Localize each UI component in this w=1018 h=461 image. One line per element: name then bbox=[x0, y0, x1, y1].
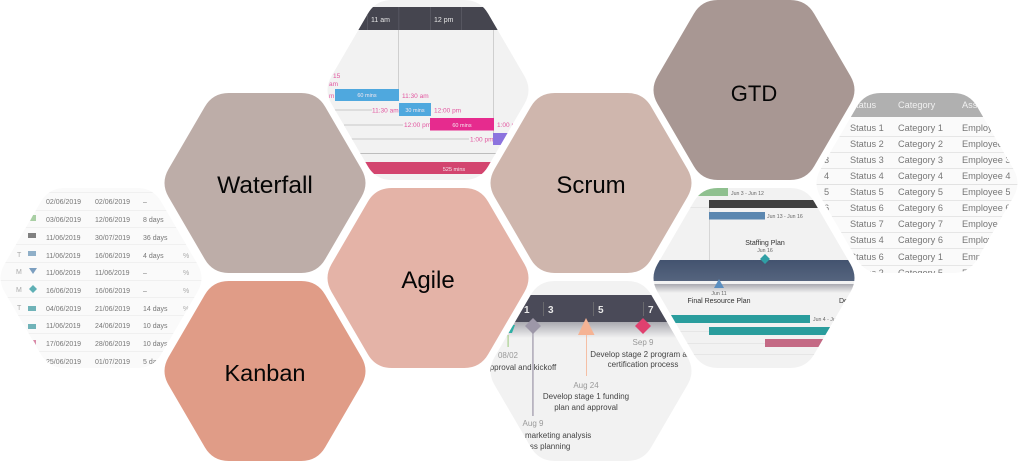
panel: gantt chart hexagon bbox=[654, 188, 854, 368]
panel: gantt chart hexagon: Final Resource Plan bbox=[687, 298, 751, 305]
panel: left task table hexagon: 12/06/2019 bbox=[95, 217, 130, 224]
panel: left task table hexagon: 11/06/2019 bbox=[95, 270, 130, 277]
panel: left task table hexagon: 5 days bbox=[143, 359, 164, 366]
panel: gantt chart hexagon: Jun 13 - Jun 16 bbox=[767, 214, 803, 220]
panel: milestone timeline hexagon: ness planning bbox=[521, 442, 570, 451]
panel: left task table hexagon: 16/06/2019 bbox=[95, 253, 130, 260]
panel: left task table hexagon: 4 days bbox=[143, 253, 164, 260]
panel: milestone timeline hexagon: marketing analysis bbox=[525, 431, 591, 440]
hexagon: Kanban bbox=[164, 281, 366, 461]
panel: status table hexagon: Status 6 bbox=[850, 252, 884, 262]
panel: gantt chart hexagon: Jun 11 bbox=[711, 291, 727, 297]
panel: calendar timeline hexagon: 12:00 pm bbox=[404, 122, 431, 129]
panel: left task table hexagon: M bbox=[16, 287, 22, 294]
panel: milestone timeline hexagon: Sep 9 bbox=[633, 338, 654, 347]
panel: milestone timeline hexagon: 1 bbox=[524, 305, 530, 316]
panel: gantt chart hexagon: Jun 16 bbox=[757, 248, 773, 254]
panel: milestone timeline hexagon: pproval and kickoff bbox=[490, 363, 557, 372]
panel: calendar timeline hexagon: 15 bbox=[333, 73, 341, 80]
panel: milestone timeline hexagon: certification process bbox=[608, 360, 678, 369]
panel: status table hexagon: Category 5 bbox=[898, 187, 943, 197]
panel: status table hexagon: Category 4 bbox=[898, 171, 943, 181]
panel: left task table hexagon: M bbox=[16, 269, 22, 276]
panel: status table hexagon: Status 1 bbox=[850, 123, 884, 133]
panel: calendar timeline hexagon bbox=[320, 0, 536, 180]
panel: milestone timeline hexagon: Aug 9 bbox=[523, 419, 544, 428]
panel: left task table hexagon: % bbox=[183, 270, 189, 277]
panel: calendar timeline hexagon: 11:30 am bbox=[372, 108, 399, 114]
panel: gantt chart hexagon: Staffing Plan bbox=[745, 240, 785, 247]
panel: status table hexagon: Status 5 bbox=[850, 187, 884, 197]
panel: status table hexagon: Status 4 bbox=[850, 235, 884, 245]
panel: status table hexagon bbox=[810, 93, 1018, 278]
panel: status table hexagon: Category 6 bbox=[898, 203, 943, 213]
panel: status table hexagon: Category 5 bbox=[898, 268, 943, 278]
hexagon: Scrum: Scrum bbox=[556, 172, 626, 199]
panel: status table hexagon: Category 2 bbox=[898, 139, 943, 149]
panel: status table hexagon: Category bbox=[898, 100, 936, 110]
panel: calendar timeline hexagon: 1:00 pm bbox=[470, 136, 494, 144]
panel: milestone timeline hexagon: plan and approval bbox=[554, 403, 618, 412]
panel: left task table hexagon: % bbox=[183, 288, 189, 295]
panel: status table hexagon: Employee 1 bbox=[962, 123, 1011, 133]
panel: left task table hexagon: 11/06/2019 bbox=[46, 323, 81, 330]
panel: left task table hexagon: 8 days bbox=[143, 217, 164, 224]
panel: left task table hexagon: 24/06/2019 bbox=[95, 323, 130, 330]
panel: status table hexagon: Category 6 bbox=[898, 235, 943, 245]
hexagon: Kanban: Kanban bbox=[224, 360, 306, 386]
panel: left task table hexagon: 04/06/2019 bbox=[46, 306, 81, 313]
panel: calendar timeline hexagon: 525 mins bbox=[443, 167, 465, 173]
hexagon: Waterfall bbox=[164, 93, 366, 273]
panel: status table hexagon: 5 bbox=[824, 187, 829, 197]
panel: left task table hexagon: 14 days bbox=[143, 306, 168, 313]
hexagon: Scrum bbox=[490, 93, 692, 273]
panel: calendar timeline hexagon: 60 mins bbox=[357, 93, 377, 99]
panel: left task table hexagon: 03/06/2019 bbox=[46, 217, 81, 224]
panel: status table hexagon: 6 bbox=[824, 203, 829, 213]
panel: left task table hexagon: 02/06/2019 bbox=[95, 199, 130, 206]
panel: gantt chart hexagon: Jun 4 - Jun 30 bbox=[813, 317, 846, 323]
panel: left task table hexagon: 25/06/2019 bbox=[46, 359, 81, 366]
panel: milestone timeline hexagon: 5 bbox=[598, 305, 604, 316]
panel: status table hexagon: Employee 4 bbox=[962, 235, 1011, 245]
panel: left task table hexagon: 02/06/2019 bbox=[46, 199, 81, 206]
panel: calendar timeline hexagon: 1:00 pm bbox=[497, 122, 520, 129]
hexagon: Agile: Agile bbox=[401, 267, 455, 294]
panel: calendar timeline hexagon: 12 pm bbox=[434, 17, 454, 24]
panel: status table hexagon: Employee 3 bbox=[962, 155, 1011, 165]
panel: status table hexagon: Employee 7 bbox=[962, 219, 1011, 229]
panel: left task table hexagon: – bbox=[143, 270, 147, 277]
panel: status table hexagon: Status 3 bbox=[850, 155, 884, 165]
panel: left task table hexagon: 21/06/2019 bbox=[95, 306, 130, 313]
panel: status table hexagon: Category 1 bbox=[898, 252, 943, 262]
hexagon: GTD: GTD bbox=[731, 81, 777, 106]
panel: gantt chart hexagon: Development bbox=[839, 298, 880, 305]
panel: status table hexagon: Category 1 bbox=[898, 123, 943, 133]
panel: milestone timeline hexagon: Develop stage 1 funding bbox=[543, 392, 629, 401]
panel: status table hexagon: Status 6 bbox=[850, 203, 884, 213]
panel: milestone timeline hexagon bbox=[485, 281, 697, 461]
panel: status table hexagon: 4 bbox=[824, 171, 829, 181]
panel: calendar timeline hexagon: 60 mins bbox=[452, 123, 472, 129]
panel: milestone timeline hexagon: Aug 24 bbox=[573, 381, 599, 390]
panel: calendar timeline hexagon: 30 mins bbox=[405, 108, 425, 114]
panel: calendar timeline hexagon: m bbox=[329, 93, 334, 100]
panel: left task table hexagon: 30/07/2019 bbox=[95, 235, 130, 242]
panel: left task table hexagon: % bbox=[183, 306, 189, 313]
panel: status table hexagon: Employee 6 bbox=[962, 203, 1011, 213]
hexagon: GTD bbox=[654, 0, 854, 180]
panel: status table hexagon: Assigned bbox=[962, 100, 1000, 110]
panel: left task table hexagon: 11/06/2019 bbox=[46, 270, 81, 277]
panel: calendar timeline hexagon: 11:30 am bbox=[402, 93, 429, 100]
panel: left task table hexagon: 10 days bbox=[143, 341, 168, 348]
panel: status table hexagon: 3 bbox=[824, 155, 829, 165]
panel: status table hexagon: Employee 5 bbox=[962, 187, 1011, 197]
panel: status table hexagon: Employee 4 bbox=[962, 171, 1011, 181]
panel: left task table hexagon: – bbox=[143, 288, 147, 295]
panel: left task table hexagon: 16/06/2019 bbox=[46, 288, 81, 295]
panel: calendar timeline hexagon: am bbox=[329, 81, 338, 88]
panel: left task table hexagon: 17/06/2019 bbox=[46, 341, 81, 348]
panel: status table hexagon: Status bbox=[850, 100, 876, 110]
panel: left task table hexagon: 10 days bbox=[143, 323, 168, 330]
panel: milestone timeline hexagon: 3 bbox=[548, 305, 554, 316]
panel: milestone timeline hexagon: 7 bbox=[648, 305, 654, 316]
panel: status table hexagon: Category 7 bbox=[898, 219, 943, 229]
panel: status table hexagon: Category 3 bbox=[898, 155, 943, 165]
panel: left task table hexagon: – bbox=[143, 199, 147, 206]
panel: left task table hexagon: 11/06/2019 bbox=[46, 235, 81, 242]
panel: status table hexagon: Employee 6 bbox=[962, 252, 1011, 262]
panel: status table hexagon: Employee 2 bbox=[962, 268, 1011, 278]
panel: gantt chart hexagon: Jun 3 - Jun 12 bbox=[731, 191, 764, 197]
panel: left task table hexagon: T bbox=[17, 305, 22, 312]
panel: calendar timeline hexagon: 12:00 pm bbox=[434, 108, 461, 114]
panel: left task table hexagon: 16/06/2019 bbox=[95, 288, 130, 295]
panel: left task table hexagon: 36 days bbox=[143, 235, 168, 242]
panel: left task table hexagon: 11/06/2019 bbox=[46, 253, 81, 260]
panel: left task table hexagon bbox=[0, 188, 204, 368]
panel: calendar timeline hexagon: 11 am bbox=[371, 17, 390, 24]
panel: status table hexagon: Employee 2 bbox=[962, 139, 1011, 149]
panel: milestone timeline hexagon: Develop stage 2 program and bbox=[590, 350, 696, 359]
panel: milestone timeline hexagon: 08/02 bbox=[498, 351, 519, 360]
panel: status table hexagon: Status 4 bbox=[850, 171, 884, 181]
panel: left task table hexagon: 28/06/2019 bbox=[95, 341, 130, 348]
hexagon: Agile bbox=[328, 188, 528, 368]
panel: left task table hexagon: % bbox=[183, 253, 189, 260]
panel: status table hexagon: Status 7 bbox=[850, 219, 884, 229]
panel: left task table hexagon: T bbox=[17, 252, 22, 259]
hexagon: Waterfall: Waterfall bbox=[217, 172, 313, 199]
panel: left task table hexagon: 01/07/2019 bbox=[95, 359, 130, 366]
panel: status table hexagon: Status 2 bbox=[850, 139, 884, 149]
panel: status table hexagon: Status 2 bbox=[850, 268, 884, 278]
